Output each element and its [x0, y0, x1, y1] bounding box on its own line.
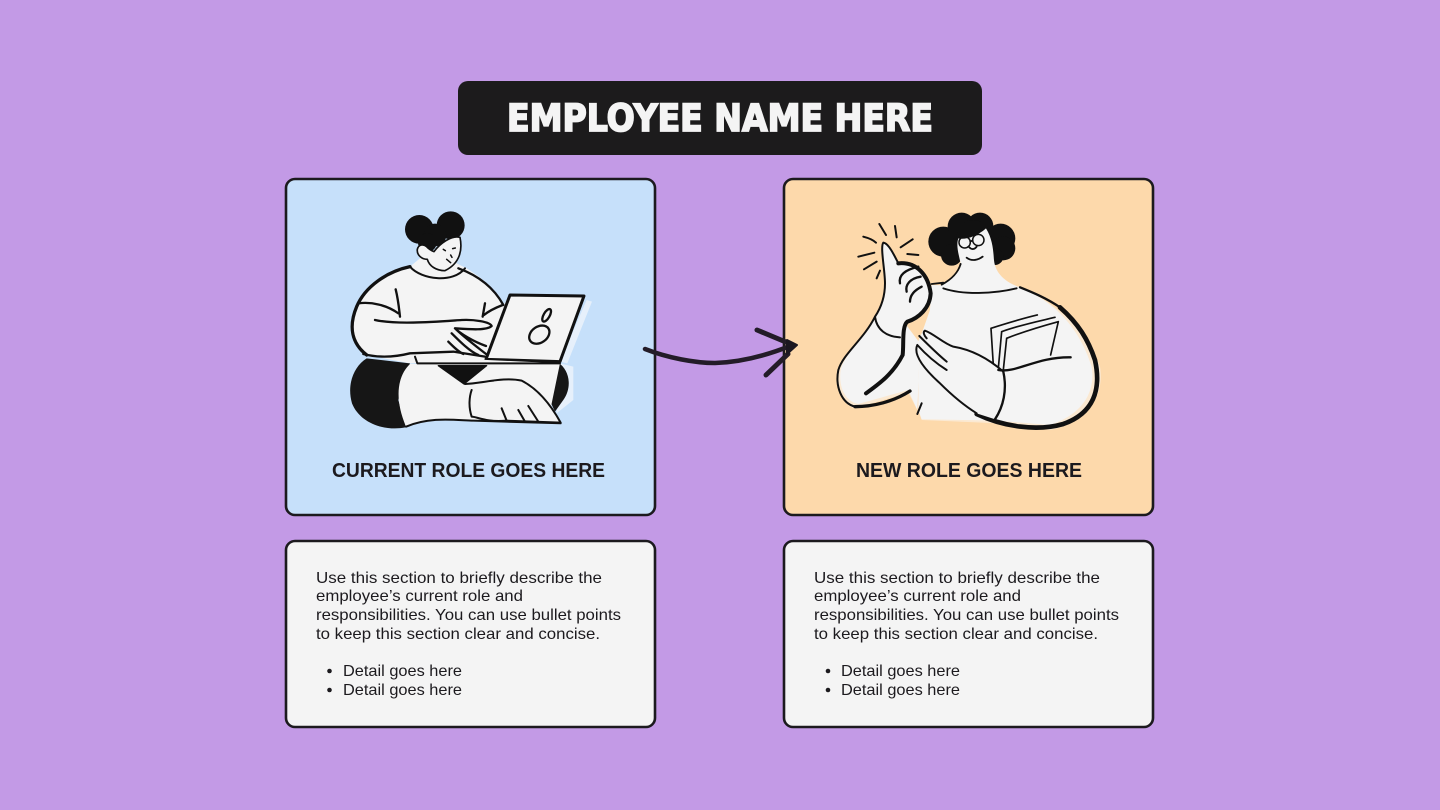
- face and neck: [942, 228, 1020, 290]
- panel: new role: [784, 179, 1153, 515]
- arrow: [645, 330, 797, 375]
- panel: new role description: [784, 541, 1153, 727]
- bullet list: [826, 663, 960, 699]
- description text: employee’s current role and: [316, 588, 523, 605]
- description text: responsibilities. You can use bullet points: [814, 607, 1119, 624]
- hair: [928, 213, 1015, 266]
- bullet list: Detail goes here: [841, 682, 960, 699]
- description text: responsibilities. You can use bullet points: [316, 607, 621, 624]
- icon: person working on laptop: [350, 211, 592, 428]
- description text: to keep this section clear and concise.: [316, 626, 600, 643]
- panel: current role: [286, 179, 655, 515]
- hair: [405, 211, 465, 252]
- description text: to keep this section clear and concise.: [814, 626, 1098, 643]
- description text: employee’s current role and: [814, 588, 1021, 605]
- panel: current role description: [286, 541, 655, 727]
- bullet list: Detail goes here: [841, 663, 960, 680]
- description text: Use this section to briefly describe the: [814, 570, 1100, 587]
- role label: CURRENT ROLE GOES HERE: [332, 460, 605, 482]
- bullet list: Detail goes here: [343, 663, 462, 680]
- icon: person pointing and holding a book: [837, 213, 1101, 430]
- face: [417, 237, 461, 271]
- bullet list: Detail goes here: [343, 682, 462, 699]
- description text: Use this section to briefly describe the: [316, 570, 602, 587]
- title: EMPLOYEE NAME HERE: [507, 97, 933, 140]
- description text: [814, 570, 1119, 643]
- description text: [316, 570, 621, 643]
- bullet list: [327, 663, 462, 699]
- role label: NEW ROLE GOES HERE: [856, 460, 1082, 482]
- title: [458, 81, 982, 155]
